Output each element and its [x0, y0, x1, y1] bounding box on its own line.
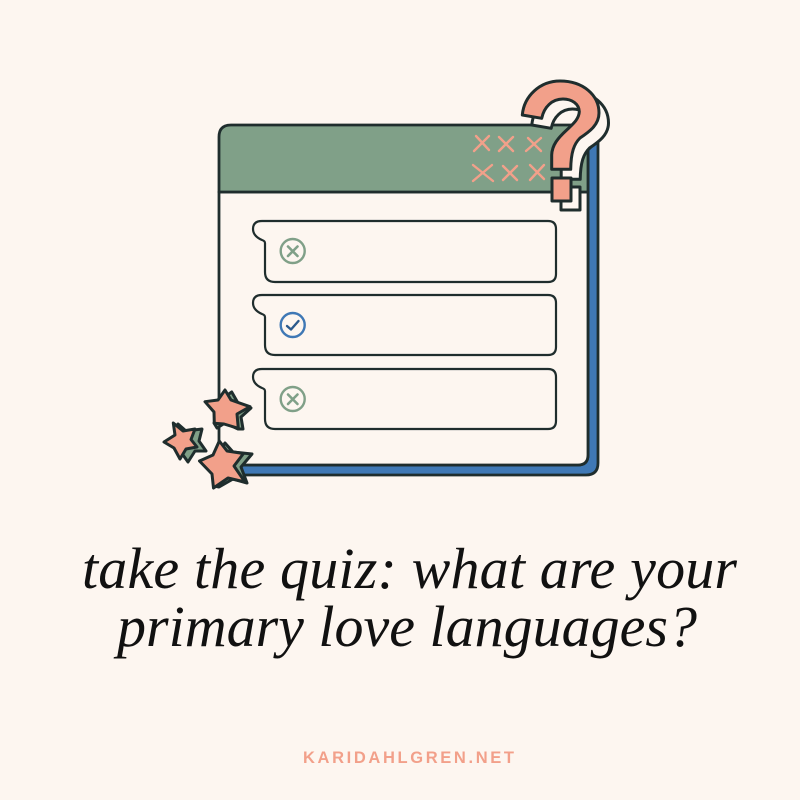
icon: wrong answer	[281, 239, 305, 263]
flower top	[205, 390, 251, 429]
flower bottom	[200, 441, 252, 488]
answer option 2	[253, 295, 556, 355]
icon: correct answer	[281, 313, 305, 337]
window body	[219, 192, 588, 465]
answer option 1	[253, 221, 556, 282]
icon: wrong answer	[281, 387, 305, 411]
footer url: KARIDAHLGREN.NET	[303, 749, 514, 767]
title: take the quiz: what are your	[82, 536, 737, 601]
question mark	[522, 81, 599, 201]
blue window shadow	[240, 140, 598, 475]
header x marks	[473, 136, 544, 181]
answer option 3	[253, 369, 556, 429]
title: primary love languages?	[113, 594, 697, 659]
window header bar	[219, 125, 588, 192]
title	[82, 536, 737, 659]
question mark shadow	[532, 91, 608, 210]
quiz window illustration	[164, 81, 608, 488]
flower left	[164, 423, 206, 462]
